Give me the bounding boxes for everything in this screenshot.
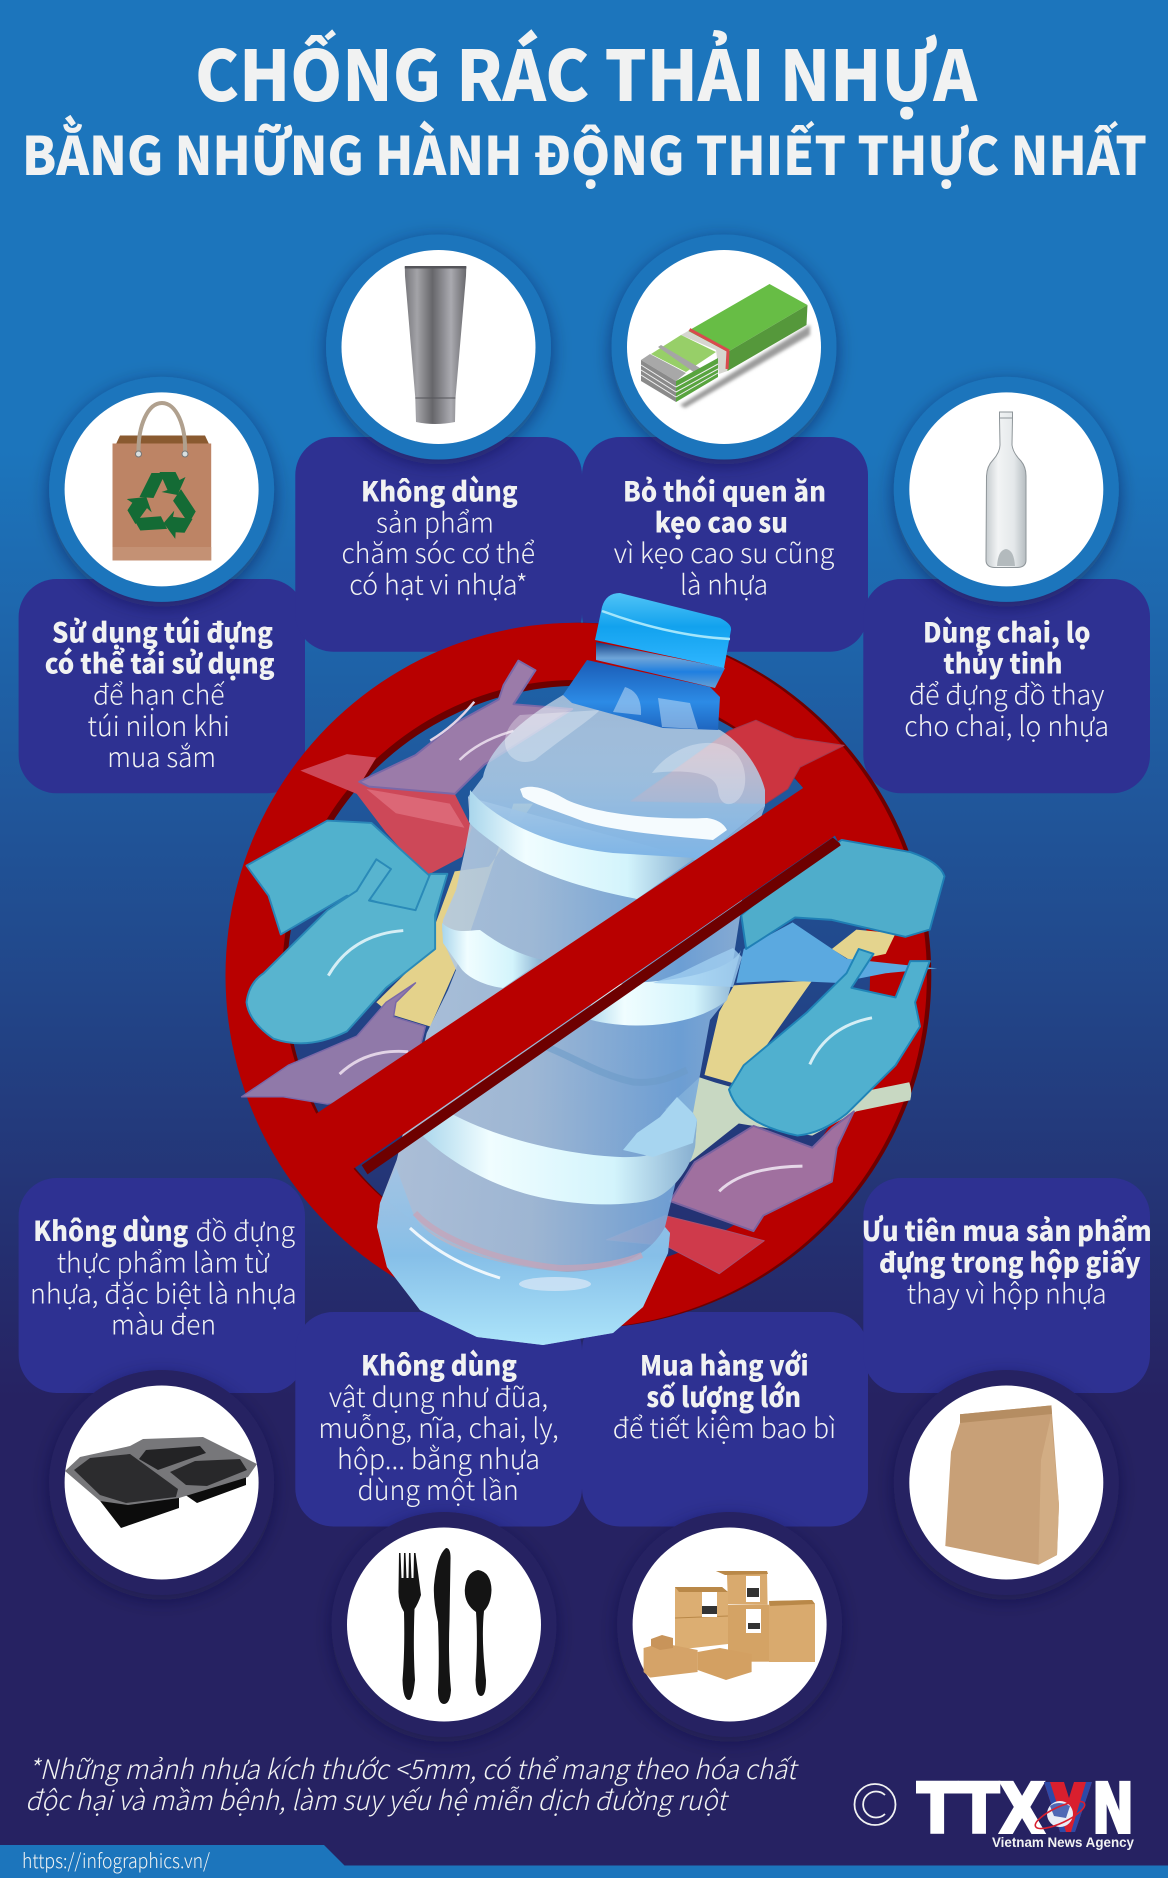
text: body care products: chăm sóc cơ thể	[342, 531, 535, 571]
tagline: Vietnam News Agency	[992, 1834, 1134, 1850]
wordmark: TTX	[917, 1770, 1045, 1850]
bag: red upper right	[631, 720, 844, 804]
text: glass bottles: Dùng chai, lọ	[923, 610, 1090, 650]
footnote	[25, 1748, 799, 1818]
panel: black plastic food containers	[19, 1178, 305, 1595]
panel: glass bottles	[863, 377, 1150, 793]
highlight: shoulder wave	[520, 787, 727, 840]
bottle body	[377, 797, 765, 1345]
prohibition ring	[225, 623, 931, 1329]
text: reusable bag: để hạn chế	[93, 672, 225, 712]
bottle base	[377, 1167, 670, 1345]
bag: red left	[300, 754, 472, 876]
footer bar	[0, 1845, 1168, 1878]
text: black plastic food containers: thực phẩm làm từ	[57, 1240, 270, 1280]
bag: teal rectangle right	[741, 840, 944, 949]
text: body care products	[342, 470, 535, 602]
bag: purple lower right	[670, 1111, 854, 1231]
text: paper packaging: Ưu tiên mua sản phẩm	[862, 1209, 1152, 1249]
text: reusable bag: có thể tái sử dụng	[45, 642, 275, 682]
title: CHỐNG RÁC THẢI NHỰA	[195, 21, 978, 122]
bag: purple upper left	[359, 661, 572, 794]
band two left	[442, 923, 543, 988]
text: buy in bulk: Mua hàng với	[640, 1344, 809, 1384]
text: glass bottles: để đựng đồ thay	[909, 672, 1105, 712]
text: reusable bag: Sử dụng túi đựng	[52, 610, 273, 650]
text: single-use plastic items: muỗng, nĩa, chai, ly,	[318, 1406, 559, 1446]
text: black plastic food containers: màu đen	[111, 1302, 216, 1342]
logo: copyright and TTXVN	[854, 1770, 1134, 1850]
band two right	[585, 950, 741, 1025]
bag: red lower right	[607, 1216, 764, 1274]
text: single-use plastic items: hộp... bằng nhựa	[337, 1437, 540, 1477]
text: glass bottles	[904, 610, 1109, 744]
text: chewing gum: Bỏ thói quen ăn	[623, 470, 826, 510]
text: buy in bulk: để tiết kiệm bao bì	[613, 1406, 836, 1446]
text: paper packaging: thay vì hộp nhựa	[907, 1272, 1107, 1312]
text: single-use plastic items: Không dùng	[361, 1344, 517, 1384]
source url: https://infographics.vn/	[22, 1845, 210, 1874]
text: reusable bag: túi nilon khi	[88, 704, 230, 744]
bag: purple lower left	[242, 983, 425, 1104]
bag: yellow left	[376, 804, 533, 1027]
text: single-use plastic items: vật dụng như đũa,	[329, 1375, 548, 1415]
text: body care products: sản phẩm	[376, 500, 494, 540]
bag: blue middle right	[736, 922, 937, 983]
text: chewing gum: kẹo cao su	[655, 500, 788, 540]
text: buy in bulk	[613, 1344, 836, 1446]
plastic water bottle	[377, 593, 765, 1345]
text: black plastic food containers	[30, 1209, 297, 1342]
wordmark: N	[1092, 1770, 1134, 1850]
bag: yellow right	[704, 930, 896, 1085]
bottle neck	[596, 642, 725, 688]
bottle collar	[563, 660, 720, 730]
bag: teal rectangle left	[247, 821, 445, 934]
bag: teal handled right	[729, 949, 930, 1136]
footnote: *Những mảnh nhựa kích thước <5mm, có thể mang theo hóa chất	[28, 1748, 799, 1787]
central illustration: no plastic sign	[225, 593, 944, 1345]
icon: food container	[65, 1437, 257, 1528]
text: chewing gum	[614, 470, 834, 602]
band three	[420, 1113, 697, 1204]
bottle cap	[595, 593, 731, 668]
text: black plastic food containers: nhựa, đặc biệt là nhựa	[30, 1272, 297, 1312]
icon: paper bag with recycling symbol	[112, 403, 211, 560]
text: buy in bulk: số lượng lớn	[646, 1375, 801, 1415]
footnote: độc hại và mầm bệnh, làm suy yếu hệ miễn dịch đường ruột	[25, 1779, 730, 1818]
text: glass bottles: cho chai, lọ nhựa	[904, 704, 1109, 744]
bag: pale green strip	[665, 1077, 911, 1162]
text: body care products: có hạt vi nhựa*	[349, 562, 528, 602]
panel: body care products	[295, 234, 582, 652]
text: paper packaging	[862, 1209, 1152, 1312]
icon: paper bag	[945, 1405, 1059, 1565]
icon: cosmetic tube	[405, 266, 466, 424]
text: chewing gum: vì kẹo cao su cũng	[614, 531, 834, 571]
panel: chewing gum	[582, 234, 868, 652]
title	[22, 21, 1147, 191]
body wave	[547, 1047, 687, 1082]
prohibition bar	[316, 788, 841, 1174]
icon: chewing gum pack	[641, 284, 810, 408]
text: glass bottles: thủy tinh	[943, 642, 1063, 682]
text: single-use plastic items: dùng một lần	[358, 1468, 519, 1508]
text: black plastic food containers: Không dùng	[33, 1209, 188, 1249]
icon: cardboard boxes	[644, 1571, 815, 1680]
icon: black cutlery	[398, 1548, 492, 1704]
icon: glass bottle	[986, 412, 1026, 568]
bag: teal handled left	[247, 859, 447, 1043]
bottle shoulder	[468, 695, 765, 860]
text: reusable bag: mua sắm	[107, 735, 216, 775]
text: reusable bag	[45, 610, 275, 775]
highlight: shoulder bubble	[652, 743, 745, 804]
panel: buy in bulk	[582, 1312, 868, 1737]
text: paper packaging: đựng trong hộp giấy	[879, 1240, 1141, 1280]
wordmark	[917, 1770, 1134, 1850]
panel: single-use plastic items	[295, 1312, 582, 1737]
band one	[469, 790, 695, 899]
text: chewing gum: là nhựa	[680, 562, 768, 602]
icon: copyright	[854, 1784, 896, 1825]
panel: paper packaging	[862, 1178, 1152, 1595]
plastic bags	[242, 661, 944, 1274]
panel: reusable bag	[19, 377, 305, 793]
text: body care products: Không dùng	[361, 470, 518, 510]
text: black plastic food containers: đồ đựng	[196, 1209, 295, 1249]
text: single-use plastic items	[318, 1344, 559, 1508]
